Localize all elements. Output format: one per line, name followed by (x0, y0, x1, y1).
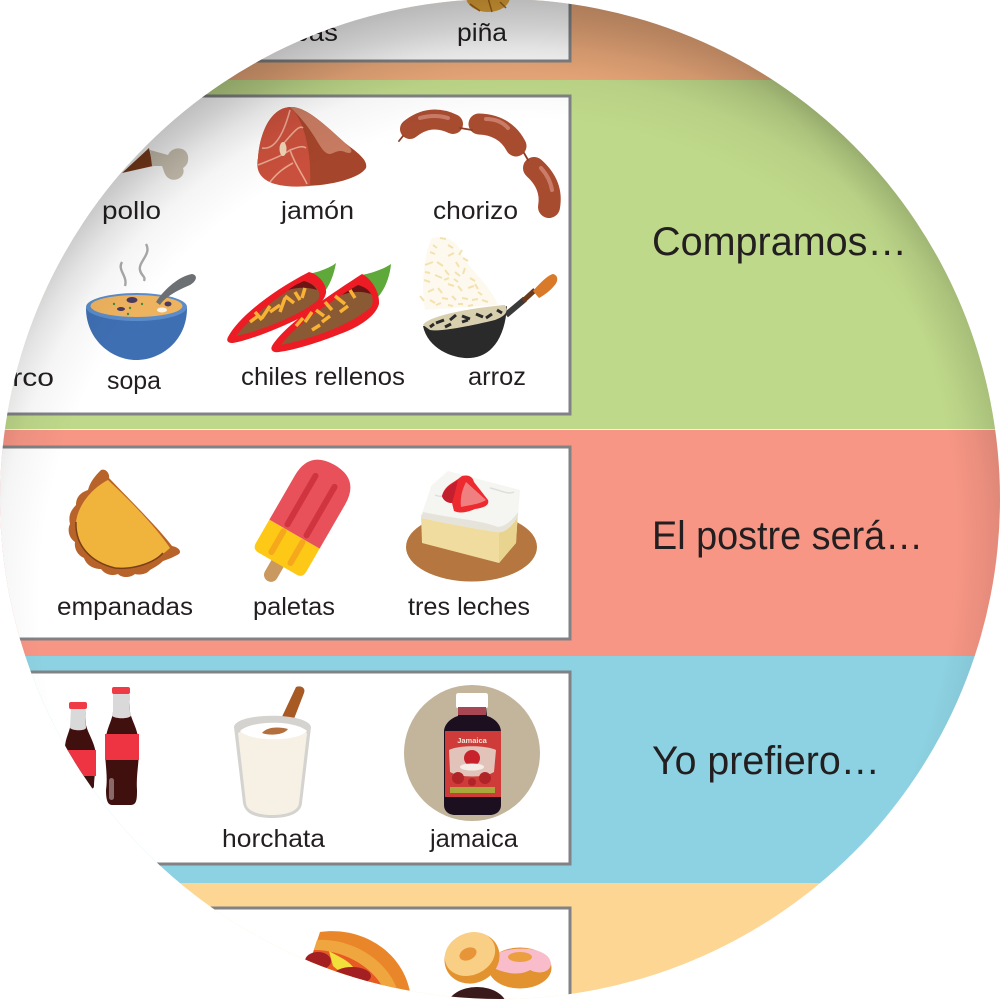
label: jamaica: jamaica (429, 825, 518, 853)
icon: jamaica bottle (404, 685, 540, 821)
icon: cola bottles (60, 687, 139, 805)
label: tres leches: tres leches (408, 593, 530, 621)
icon: chiles rellenos (227, 263, 391, 352)
label: chorizo: chorizo (433, 197, 518, 225)
heading: Compramos: Compramos… (652, 220, 907, 264)
label: chiles rellenos: chiles rellenos (241, 363, 405, 391)
heading: Yo prefiero: Yo prefiero… (652, 739, 880, 783)
label: horchata: horchata (222, 825, 325, 853)
icon: ham (257, 107, 366, 187)
icon: tres leches (406, 471, 537, 582)
label: guayabas: guayabas (218, 19, 338, 47)
label: sopa: sopa (107, 367, 161, 395)
icon: popsicle (254, 460, 350, 582)
label: empanadas: empanadas (57, 593, 193, 621)
panel: fruit row (orange) (228, 0, 773, 80)
icon: horchata glass (234, 686, 311, 818)
icon: jamaica bottle: Jamaica (457, 736, 488, 745)
label: jamón: jamón (280, 197, 354, 225)
icon: soup bowl (86, 244, 196, 360)
icon: donuts (444, 932, 552, 999)
icon: chicken drumstick (122, 148, 188, 180)
panel: Yo prefiero (blue) (0, 656, 1000, 883)
panel: El postre (salmon) (0, 430, 1000, 656)
icon: pizza slice (300, 931, 410, 992)
label: arroz: arroz (468, 363, 526, 391)
icon: empanada (69, 470, 180, 577)
panel: Compramos (green) (0, 80, 1000, 430)
label: piña: piña (457, 19, 507, 47)
icon: rice in wok (420, 237, 557, 358)
icon: chorizo (399, 116, 552, 207)
label: paletas: paletas (253, 593, 335, 621)
icon: pineapple bottom (466, 0, 510, 12)
heading: El postre será: El postre será… (652, 514, 923, 558)
panel: treats (yellow) (180, 883, 820, 999)
label: pollo: pollo (102, 197, 161, 225)
inner vignette shading (0, 0, 1000, 706)
